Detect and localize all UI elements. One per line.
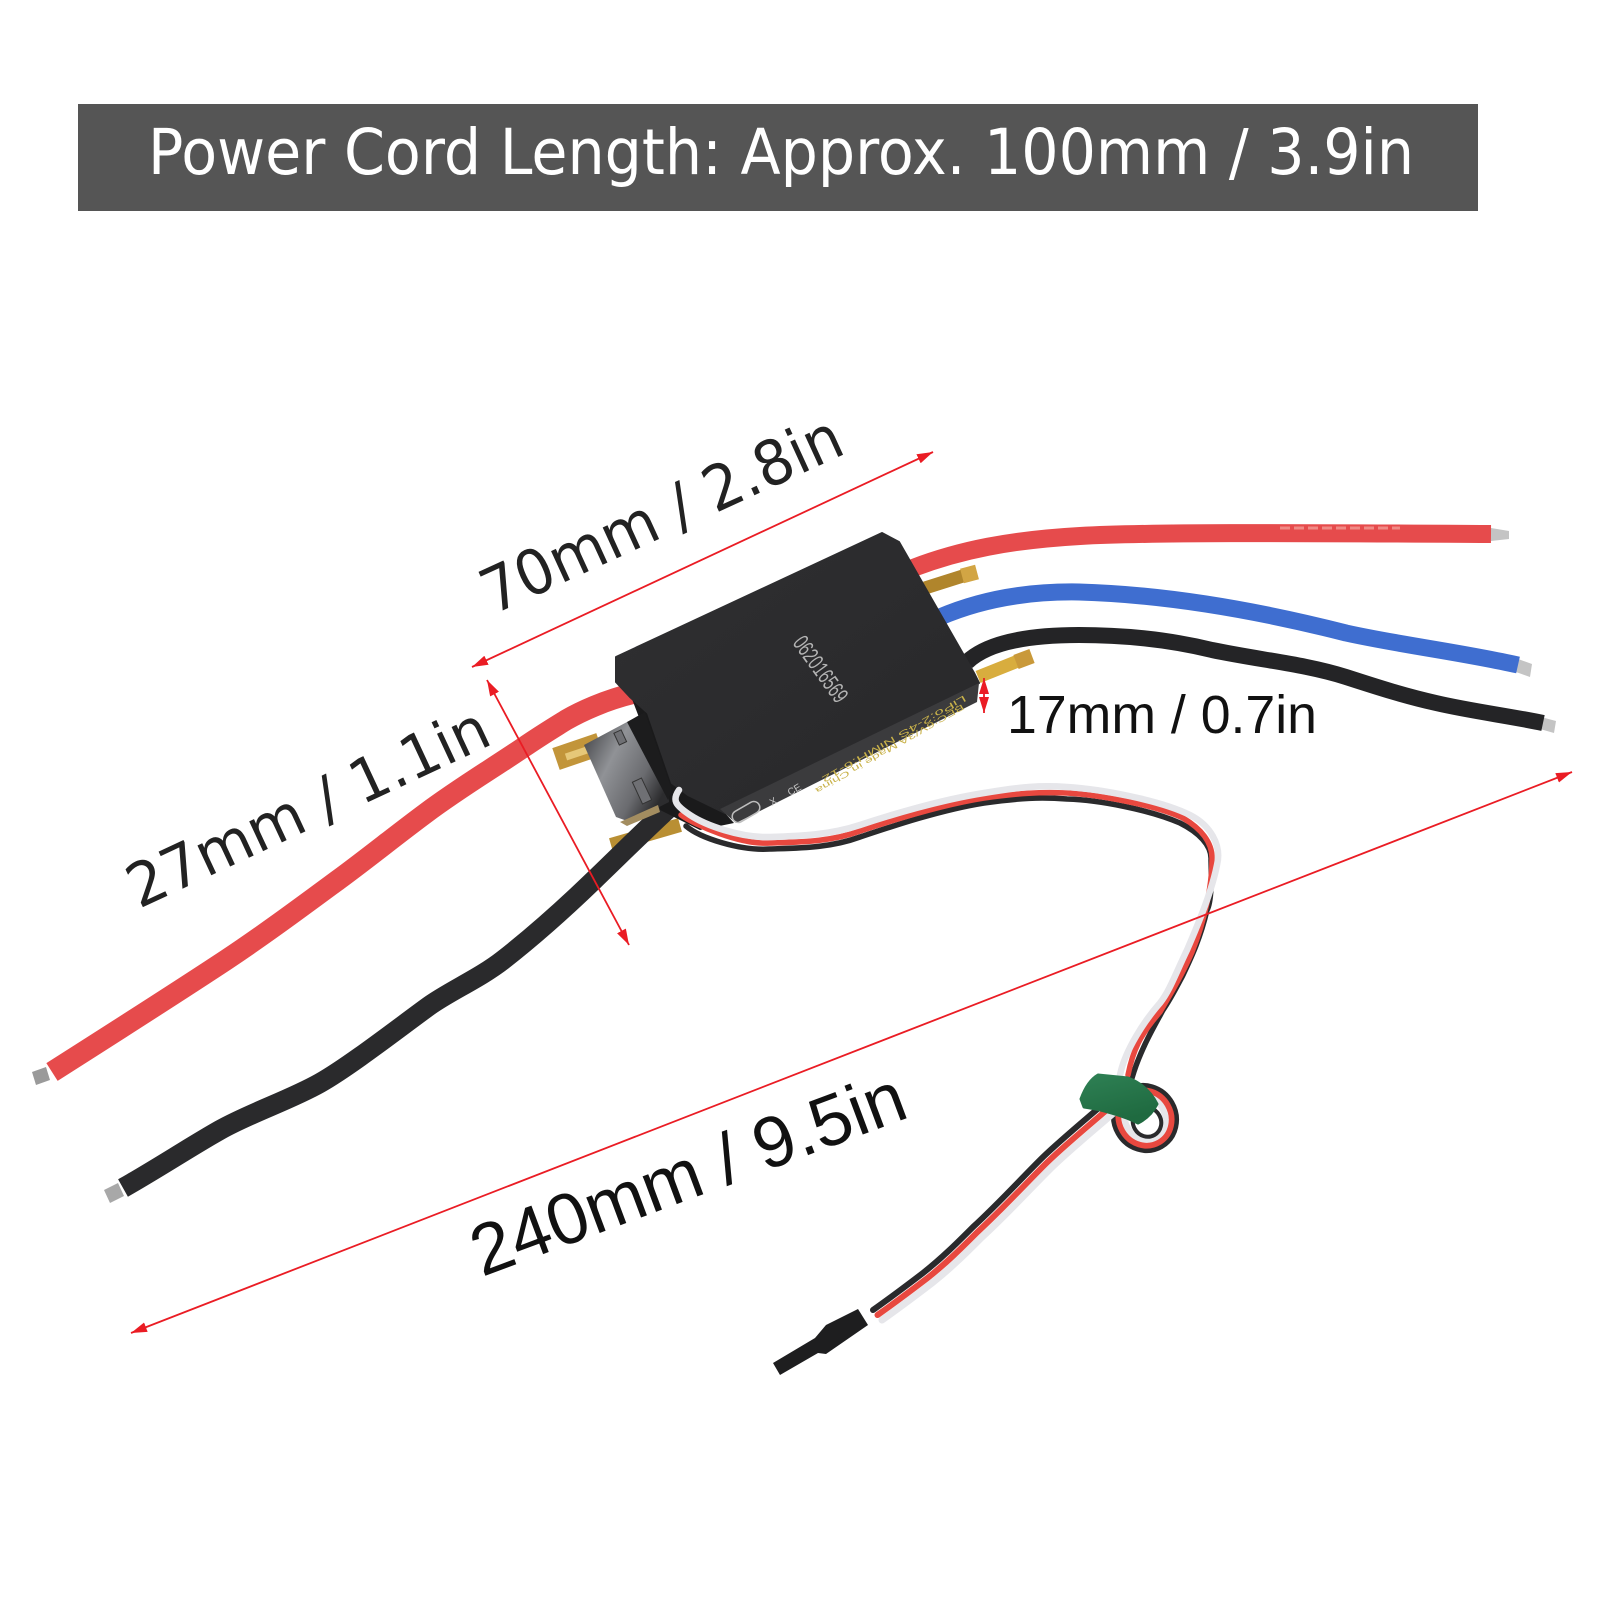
servo lead — [675, 786, 1218, 1078]
strip icons — [730, 782, 804, 825]
capacitor — [584, 712, 672, 826]
ESC body — [616, 533, 979, 830]
strip text: BEC:6V/3A Made in China — [813, 702, 966, 796]
wire knot — [1102, 1074, 1188, 1162]
label strip — [720, 683, 979, 823]
dimension: 17mm arrow — [983, 678, 985, 713]
serial number: 062016569 — [788, 631, 854, 707]
wire: left black battery lead — [104, 807, 670, 1203]
wire: top red motor lead — [913, 528, 1509, 568]
title banner: Power Cord Length: Approx. 100mm / 3.9in — [148, 116, 1414, 189]
wire: blue motor lead — [940, 592, 1532, 677]
lower servo lead — [873, 1100, 1117, 1320]
dimension: 240mm arrow — [131, 772, 1572, 1333]
strip text: LiPo:2-4S NiMH:6-12 — [820, 693, 968, 784]
top face — [616, 533, 979, 813]
side face — [616, 657, 734, 830]
servo connector — [773, 1309, 868, 1375]
dimension: 17mm label: 17mm / 0.7in — [1007, 685, 1317, 745]
dimension: 27mm label: 27mm / 1.1in — [116, 693, 501, 923]
strip text — [813, 693, 968, 796]
strip icons: CE — [786, 782, 804, 799]
strip icons: X — [768, 796, 780, 809]
green ferrite ring — [1081, 1075, 1157, 1123]
wire: black motor lead — [967, 635, 1556, 733]
dimension: 70mm label: 70mm / 2.8in — [469, 400, 854, 629]
dimension: 70mm arrow — [472, 452, 933, 667]
dimension: 240mm label: 240mm / 9.5in — [460, 1057, 917, 1292]
dimension: 27mm arrow — [487, 680, 629, 945]
gold connectors — [556, 572, 1032, 845]
wire: left red battery lead — [32, 693, 635, 1085]
title banner — [78, 104, 1478, 211]
